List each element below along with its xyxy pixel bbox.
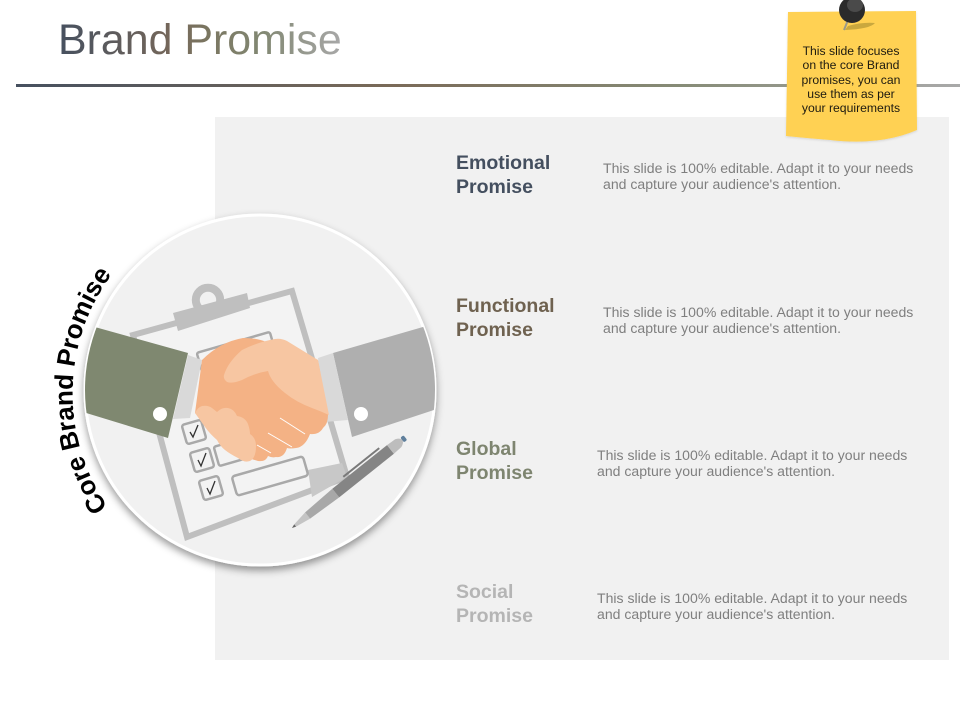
- text: emotional promise description: This slide is 100% editable. Adapt it to your needs: [603, 160, 913, 176]
- lower fingers: [195, 406, 256, 462]
- heading: emotional promise: [456, 152, 550, 198]
- sticky note text: This slide focuses: [803, 44, 899, 58]
- sticky note: [786, 0, 918, 144]
- heading: global promise: Global: [456, 438, 517, 460]
- text: social promise description: [597, 590, 907, 622]
- text: social promise description: and capture your audience's attention.: [597, 606, 835, 622]
- header rule: [16, 84, 960, 87]
- left sleeve: [85, 328, 188, 438]
- heading: functional promise: Functional: [456, 295, 555, 317]
- main hand: [195, 338, 328, 461]
- circle background: [85, 215, 435, 565]
- handshake hands: [195, 338, 329, 462]
- heading: social promise: Promise: [456, 605, 533, 627]
- curved label: core brand promise: Core Brand Promise: [54, 269, 110, 513]
- heading: global promise: [456, 438, 533, 484]
- text: social promise description: This slide is 100% editable. Adapt it to your needs: [597, 590, 907, 606]
- shirt cuffs: [173, 353, 348, 422]
- clipboard: [133, 288, 347, 537]
- right sleeve: [333, 322, 440, 437]
- text: functional promise description: [603, 304, 913, 336]
- text: global promise description: and capture your audience's attention.: [597, 463, 835, 479]
- illustration: handshake circle: [54, 212, 442, 576]
- sticky note text: [802, 44, 900, 115]
- text: global promise description: This slide is 100% editable. Adapt it to your needs: [597, 447, 907, 463]
- heading: social promise: [456, 581, 533, 627]
- sticky note text: promises, you can: [802, 72, 900, 86]
- text: functional promise description: and capture your audience's attention.: [603, 320, 841, 336]
- text: emotional promise description: and capture your audience's attention.: [603, 176, 841, 192]
- text: functional promise description: This slide is 100% editable. Adapt it to your needs: [603, 304, 913, 320]
- heading: emotional promise: Promise: [456, 176, 533, 198]
- sticky note text: on the core Brand: [803, 58, 899, 72]
- heading: emotional promise: Emotional: [456, 152, 550, 174]
- pen: [286, 431, 409, 532]
- text: emotional promise description: [603, 160, 913, 192]
- title: Brand Promise: [58, 16, 342, 64]
- heading: functional promise: [456, 295, 555, 341]
- sticky note text: your requirements: [802, 101, 900, 115]
- text: global promise description: [597, 447, 907, 479]
- heading: global promise: Promise: [456, 462, 533, 484]
- panel: promises background: [215, 117, 949, 660]
- sticky note text: use them as per: [807, 87, 895, 101]
- upper hand: [224, 339, 329, 415]
- heading: social promise: Social: [456, 581, 513, 603]
- heading: functional promise: Promise: [456, 319, 533, 341]
